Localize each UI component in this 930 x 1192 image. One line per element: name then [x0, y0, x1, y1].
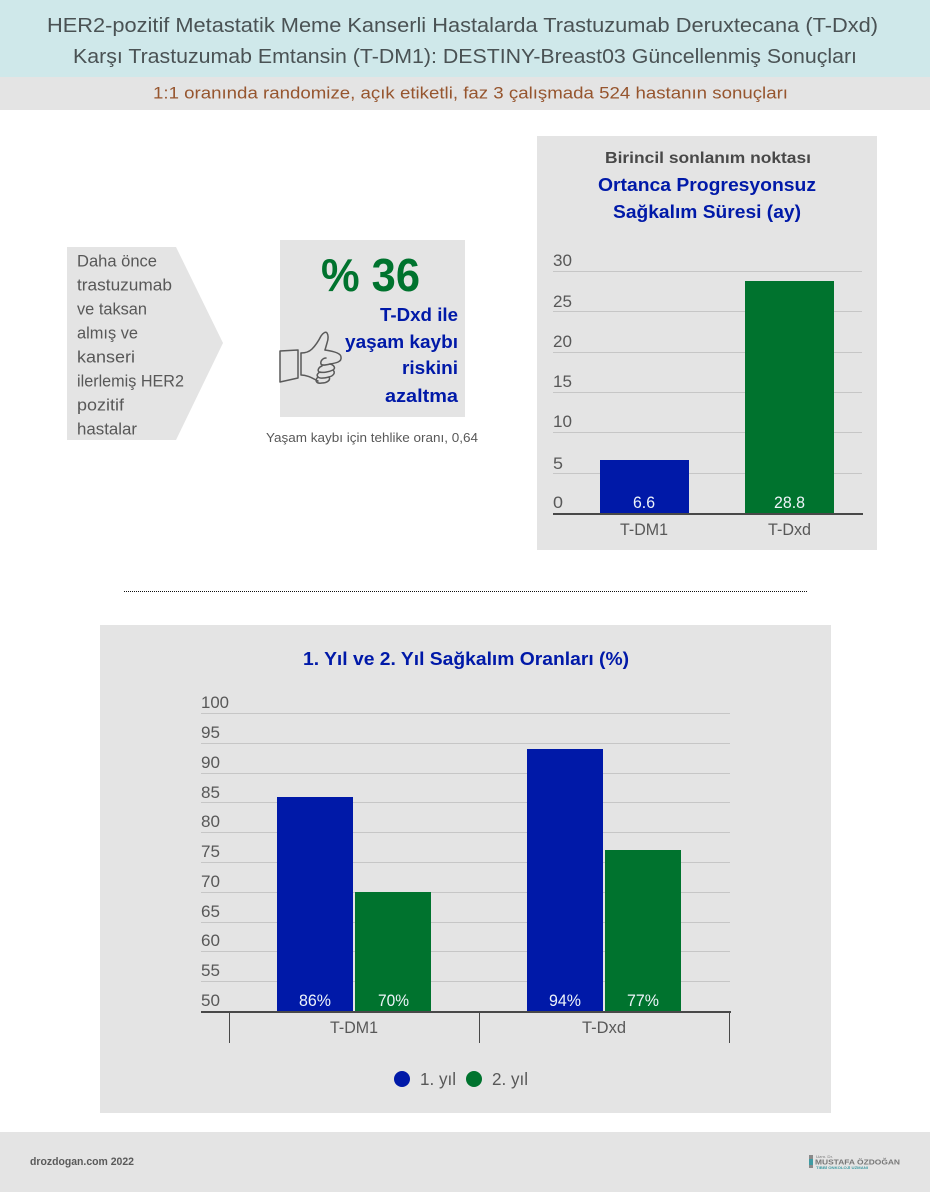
panel: survival rates chart [100, 625, 831, 1113]
callout text: azaltma [385, 386, 459, 406]
bar chart: survival by year: 70 [201, 873, 220, 891]
legend: 1. yıl [420, 1069, 456, 1089]
bar chart: survival by year: 55 [201, 962, 220, 980]
bar chart: median PFS: T-Dxd [768, 521, 811, 539]
chart heading: Ortanca Progresyonsuz [598, 175, 816, 195]
logo: TIBBİ ONKOLOJİ UZMANI [816, 1165, 868, 1170]
arrow panel: patient population: kanseri [77, 348, 135, 366]
arrow panel: patient population: Daha önce [77, 252, 157, 270]
panel: risk reduction callout [280, 240, 465, 417]
bar chart: survival by year: 100 [201, 694, 229, 712]
note: hazard ratio: Yaşam kaybı için tehlike oranı, 0,64 [266, 430, 478, 445]
arrow panel: patient population: pozitif [77, 396, 124, 414]
bar chart: survival by year: 77% [627, 992, 659, 1010]
bar chart: survival by year: 85 [201, 784, 220, 802]
big percentage: % 36 [321, 249, 420, 301]
subtitle band [0, 77, 930, 110]
bar chart: median PFS: 25 [553, 293, 572, 311]
bar chart: survival by year: 50 [201, 992, 220, 1010]
logo: MUSTAFA ÖZDOĞAN [815, 1158, 900, 1166]
bar chart: survival by year: 65 [201, 903, 220, 921]
callout text [345, 305, 459, 406]
bar chart: survival by year: T-DM1 [330, 1019, 378, 1037]
arrow panel: patient population: ilerlemiş HER2 [77, 372, 184, 390]
callout text: T-Dxd ile [380, 305, 458, 325]
bar chart: median PFS: 5 [553, 455, 563, 473]
bar chart: median PFS: 15 [553, 373, 572, 391]
chart heading: Birincil sonlanım noktası [605, 150, 811, 167]
bar chart: survival by year: 70% [378, 992, 409, 1010]
bar chart: median PFS: 30 [553, 252, 572, 270]
bar chart: survival by year: 95 [201, 724, 220, 742]
callout text: riskini [402, 358, 458, 378]
chart heading [598, 150, 816, 222]
logo: Uzm. Dr. [816, 1154, 833, 1159]
legend: 2. yıl [492, 1069, 528, 1089]
bar chart: survival by year: 86% [299, 992, 331, 1010]
arrow panel: patient population [67, 247, 223, 440]
bar chart: median PFS: T-DM1 [620, 521, 668, 539]
bar chart: survival by year: 60 [201, 932, 220, 950]
subtitle band: 1:1 oranında randomize, açık etiketli, faz 3 çalışmada 524 hastanın sonuçları [153, 84, 788, 102]
arrow panel: patient population: hastalar [77, 420, 138, 438]
bar chart: survival by year [201, 694, 731, 1043]
bar chart: median PFS [553, 252, 863, 539]
title line 2: Karşı Trastuzumab Emtansin (T-DM1): DESTINY-Breast03 Güncellenmiş Sonuçları [73, 45, 857, 68]
bar chart: survival by year: 75 [201, 843, 220, 861]
footer [0, 1132, 930, 1192]
arrow panel: patient population: ve taksan [77, 300, 147, 318]
bar chart: survival by year: T-Dxd [582, 1019, 626, 1037]
chart heading: 1. Yıl ve 2. Yıl Sağkalım Oranları (%) [303, 649, 629, 669]
chart heading: Sağkalım Süresi (ay) [613, 202, 801, 222]
bar chart: median PFS: 28.8 [774, 494, 805, 512]
arrow panel: patient population: almış ve [77, 324, 138, 342]
bar chart: survival by year: 94% [549, 992, 581, 1010]
bar chart: median PFS: 6.6 [633, 494, 655, 512]
bar chart: median PFS: 20 [553, 333, 572, 351]
bar chart: survival by year: 90 [201, 754, 220, 772]
title line 1: HER2-pozitif Metastatik Meme Kanserli Hastalarda Trastuzumab Deruxtecana (T-Dxd) [47, 14, 878, 37]
logo [809, 1154, 900, 1170]
callout text: yaşam kaybı [345, 332, 458, 352]
bar chart: median PFS: 10 [553, 413, 572, 431]
bar chart: median PFS: 0 [553, 494, 563, 512]
footer credit: drozdogan.com 2022 [30, 1156, 134, 1168]
panel: primary endpoint chart [537, 136, 877, 550]
legend [394, 1069, 528, 1089]
header: title band [0, 0, 930, 77]
bar chart: survival by year: 80 [201, 813, 220, 831]
arrow panel: patient population: trastuzumab [77, 276, 172, 294]
icon: thumbs up [280, 332, 341, 383]
